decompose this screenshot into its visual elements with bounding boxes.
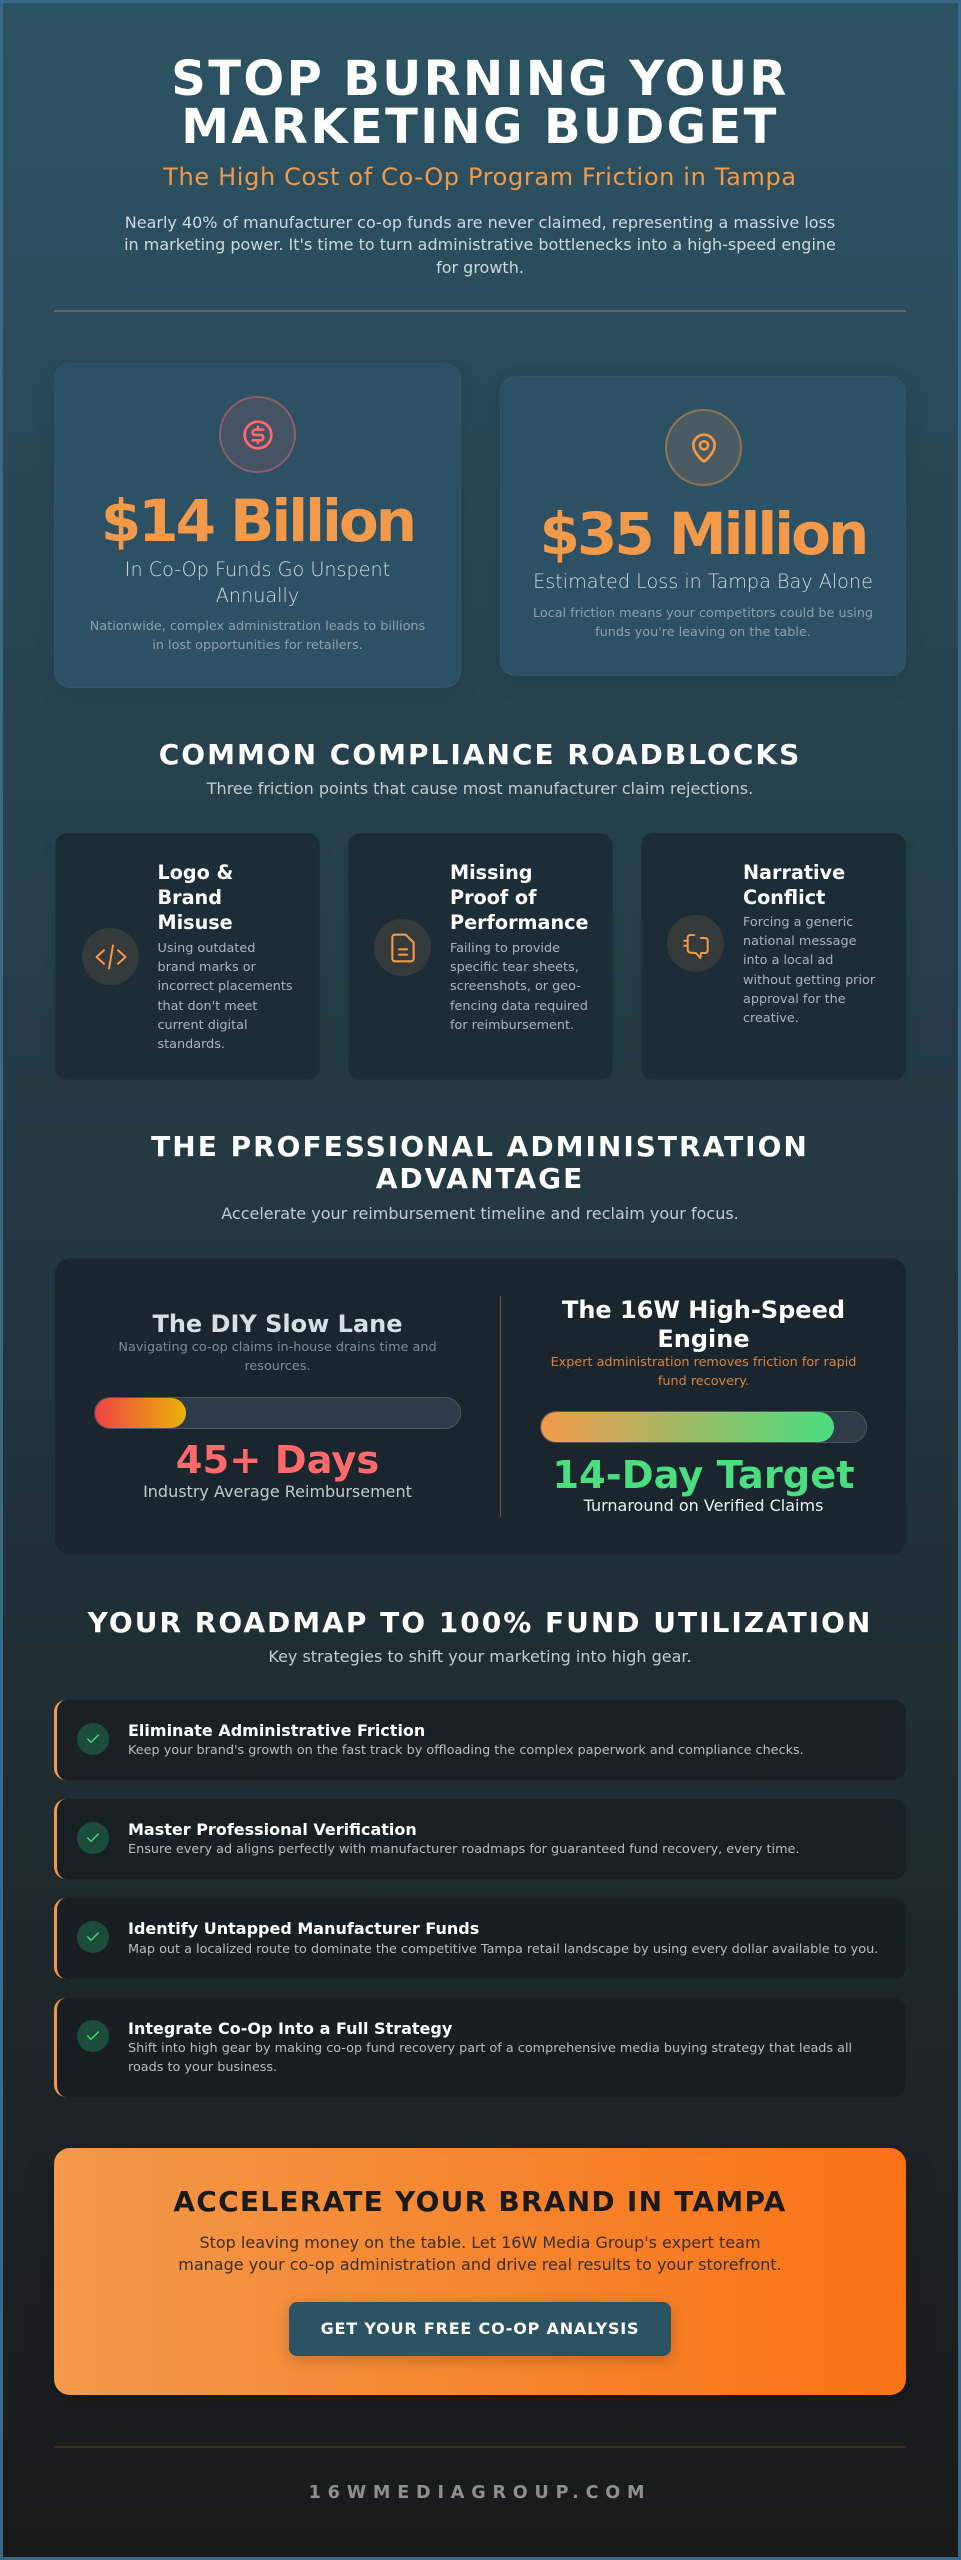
heading: professional administration advantage [151, 1130, 809, 1195]
description: screenshots, or geo- [450, 979, 581, 994]
panel: comparison [55, 1258, 906, 1555]
description: fencing data required [450, 999, 588, 1014]
note [90, 619, 425, 653]
description: that don't meet [158, 999, 257, 1014]
16W caption: Turnaround on Verified Claims [584, 1496, 823, 1515]
CTA button [289, 2302, 671, 2356]
description: Using outdated [158, 941, 255, 956]
icon: check [77, 2020, 109, 2052]
heading: Conflict [743, 886, 825, 909]
description: into a local ad [743, 953, 833, 968]
description: Forcing a generic [743, 915, 853, 930]
subheading: professional administration: Accelerate your reimbursement timeline and reclaim your focus. [221, 1204, 739, 1223]
big number: $35 Million [540, 500, 866, 568]
description: approval for the [743, 992, 846, 1007]
DIY number: 45+ Days [176, 1438, 379, 1483]
16W description [551, 1355, 856, 1389]
heading: Logo & [158, 861, 233, 884]
heading [743, 861, 845, 909]
heading [158, 861, 233, 934]
icon: speech bubble [667, 915, 724, 972]
description: Failing to provide [450, 941, 560, 956]
icon: dollar circle [219, 396, 296, 473]
DIY description [118, 1340, 437, 1374]
header [124, 51, 836, 277]
16W description: Expert administration removes friction for rapid [551, 1355, 856, 1370]
description: current digital [158, 1018, 248, 1033]
description: standards. [158, 1037, 225, 1052]
16W heading: Engine [657, 1325, 750, 1353]
panel: $35 Million stat [500, 376, 906, 676]
16W number: 14-Day Target [552, 1453, 855, 1498]
CTA paragraph: Stop leaving money on the table. Let 16W Media Group's expert team [199, 2233, 761, 2252]
icon: code [82, 928, 139, 985]
heading: professional administration advantage: ADVANTAGE [376, 1162, 584, 1195]
intro paragraph: Nearly 40% of manufacturer co-op funds are never claimed, representing a massive loss [125, 213, 835, 232]
heading [450, 861, 589, 934]
description [128, 2041, 852, 2075]
description: without getting prior [743, 973, 875, 988]
panel: $14 Billion stat [54, 363, 461, 688]
note: in lost opportunities for retailers. [152, 638, 363, 653]
CTA button: GET YOUR FREE CO-OP ANALYSIS [321, 2319, 639, 2338]
panel: narrative conflict [641, 833, 906, 1080]
title: Eliminate Administrative Friction [128, 1721, 425, 1740]
panel: logo and brand misuse [55, 833, 320, 1080]
DIY progress bar [94, 1397, 461, 1429]
CTA heading: ACCELERATE YOUR BRAND IN TAMPA [173, 2185, 787, 2218]
description: specific tear sheets, [450, 960, 579, 975]
16W progress bar [540, 1411, 867, 1443]
title: MARKETING BUDGET [181, 99, 779, 155]
DIY caption: Industry Average Reimbursement [143, 1482, 412, 1501]
heading: Performance [450, 911, 589, 934]
description: brand marks or [158, 960, 256, 975]
title: Identify Untapped Manufacturer Funds [128, 1919, 479, 1938]
heading: roadmap: YOUR ROADMAP TO 100% FUND UTILIZATION [88, 1606, 872, 1639]
description: for reimbursement. [450, 1018, 574, 1033]
list item: eliminate friction [54, 1700, 906, 1780]
note: funds you're leaving on the table. [595, 625, 811, 640]
list item: verification [54, 1799, 906, 1879]
description: creative. [743, 1011, 799, 1026]
list item: full strategy [54, 1998, 906, 2097]
heading: professional administration advantage: THE PROFESSIONAL ADMINISTRATION [151, 1130, 809, 1163]
16W column [540, 1296, 867, 1515]
16W heading: The 16W High-Speed [562, 1296, 845, 1324]
title: STOP BURNING YOUR [171, 51, 789, 107]
description: Shift into high gear by making co-op fund recovery part of a comprehensive media buying strategy that leads all [128, 2041, 852, 2056]
subheading: roadmap: Key strategies to shift your marketing into high gear. [268, 1647, 692, 1666]
description [158, 941, 293, 1052]
title [171, 51, 789, 155]
DIY column [94, 1310, 461, 1501]
description [450, 941, 588, 1033]
heading: Missing [450, 861, 532, 884]
description: Map out a localized route to dominate the competitive Tampa retail landscape by using every dollar available to you. [128, 1942, 878, 1957]
description: incorrect placements [158, 979, 293, 994]
16W heading [562, 1296, 845, 1353]
label: Annually [216, 584, 299, 607]
intro paragraph: in marketing power. It's time to turn administrative bottlenecks into a high-speed engine [124, 235, 836, 254]
panel: missing proof of performance [348, 833, 613, 1080]
heading: Narrative [743, 861, 845, 884]
DIY heading: The DIY Slow Lane [152, 1310, 403, 1338]
list item: untapped funds [54, 1898, 906, 1979]
DIY description: resources. [244, 1359, 311, 1374]
heading: Misuse [158, 911, 233, 934]
icon: document [374, 919, 431, 976]
description: Ensure every ad aligns perfectly with manufacturer roadmaps for guaranteed fund recovery, every time. [128, 1842, 800, 1857]
heading: compliance roadblocks: COMMON COMPLIANCE ROADBLOCKS [159, 738, 801, 771]
label: Estimated Loss in Tampa Bay Alone [533, 570, 873, 593]
icon: check [77, 1822, 109, 1854]
note: Local friction means your competitors could be using [533, 606, 873, 621]
intro paragraph: for growth. [436, 258, 524, 277]
heading: Brand [158, 886, 222, 909]
subheading: compliance roadblocks: Three friction points that cause most manufacturer claim rejections. [207, 779, 753, 798]
16W description: fund recovery. [658, 1374, 749, 1389]
panel: call to action [54, 2148, 906, 2395]
note: Nationwide, complex administration leads to billions [90, 619, 425, 634]
footer URL: 16WMEDIAGROUP.COM [309, 2483, 651, 2503]
column divider [500, 1296, 501, 1517]
CTA paragraph [178, 2233, 782, 2274]
heading: Proof of [450, 886, 536, 909]
description [743, 915, 876, 1026]
icon: check [77, 1723, 109, 1755]
label [125, 558, 390, 607]
icon: check [77, 1921, 109, 1953]
intro paragraph [124, 213, 836, 277]
title: Integrate Co-Op Into a Full Strategy [128, 2019, 452, 2038]
description: national message [743, 934, 856, 949]
description: roads to your business. [128, 2060, 277, 2075]
DIY description: Navigating co-op claims in-house drains time and [118, 1340, 437, 1355]
CTA paragraph: manage your co-op administration and drive real results to your storefront. [178, 2255, 782, 2274]
label: In Co-Op Funds Go Unspent [125, 558, 390, 581]
description: Keep your brand's growth on the fast track by offloading the complex paperwork and compliance checks. [128, 1743, 804, 1758]
subtitle: The High Cost of Co-Op Program Friction in Tampa [163, 163, 797, 191]
big number: $14 Billion [101, 487, 414, 555]
note [533, 606, 873, 640]
icon: map pin [665, 409, 742, 486]
title: Master Professional Verification [128, 1820, 417, 1839]
